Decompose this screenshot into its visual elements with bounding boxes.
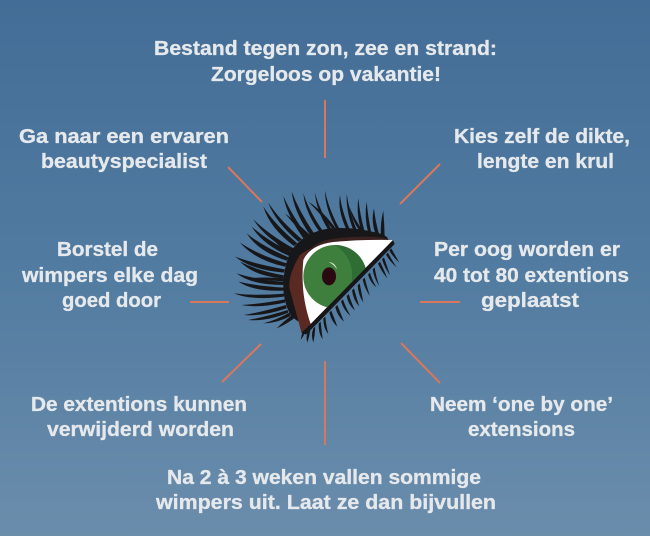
text: upper left tip: beautyspecialist <box>41 151 207 173</box>
icon: eye with lashes <box>234 191 399 343</box>
text: bottom tip <box>155 467 496 514</box>
text: lower right tip <box>430 394 613 441</box>
text: right tip <box>434 239 629 312</box>
text: upper left tip <box>19 126 229 173</box>
radiating connector lines <box>190 100 460 445</box>
text: lower right tip: extensions <box>468 419 575 441</box>
text: right tip: geplaatst <box>481 290 579 312</box>
text: top tip: Bestand tegen zon, zee en strand: <box>154 38 497 60</box>
pupil <box>322 267 336 285</box>
text: upper left tip: Ga naar een ervaren <box>19 126 229 148</box>
text: upper right tip: Kies zelf de dikte, <box>454 126 630 148</box>
iris <box>303 245 367 308</box>
text: bottom tip: Na 2 à 3 weken vallen sommige <box>167 467 481 489</box>
lower lashes <box>301 248 399 343</box>
text: lower left tip: verwijderd worden <box>47 419 234 441</box>
text: upper right tip <box>454 126 630 173</box>
text: top tip: Zorgeloos op vakantie! <box>211 64 441 86</box>
text: top tip <box>154 38 497 86</box>
catchlight <box>329 262 337 269</box>
text: left tip <box>21 239 198 312</box>
lash base mass <box>283 228 388 322</box>
text: left tip: Borstel de <box>57 239 158 261</box>
text: lower right tip: Neem ‘one by one’ <box>430 394 613 416</box>
text: upper right tip: lengte en krul <box>477 151 614 173</box>
text: left tip: wimpers elke dag <box>21 265 198 287</box>
text: lower left tip <box>31 394 247 441</box>
text: right tip: Per oog worden er <box>434 239 620 261</box>
text: right tip: 40 tot 80 extentions <box>434 265 629 287</box>
lid skin <box>289 245 320 333</box>
eye white <box>303 240 393 324</box>
upper lashes <box>234 191 385 328</box>
upper lid band <box>305 237 390 255</box>
lower lid line <box>302 240 395 335</box>
text: bottom tip: wimpers uit. Laat ze dan bijvullen <box>155 492 496 514</box>
text: left tip: goed door <box>62 290 161 312</box>
iris shade <box>335 245 366 282</box>
text: lower left tip: De extentions kunnen <box>31 394 247 416</box>
